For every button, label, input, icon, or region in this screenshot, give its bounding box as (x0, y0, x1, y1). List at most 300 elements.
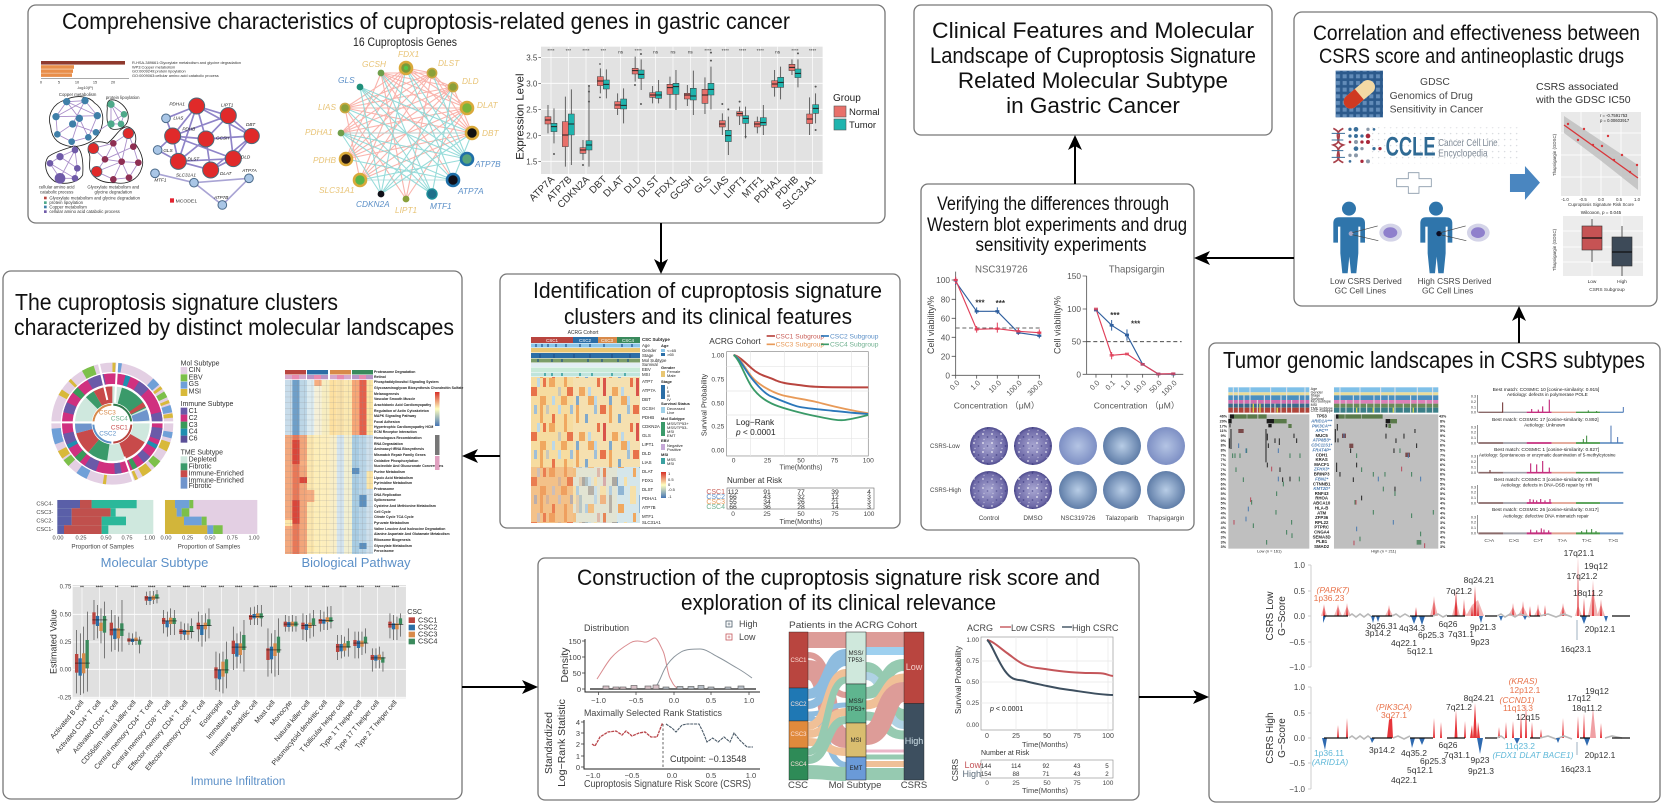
table: ACRG number at risk: 21 (831, 499, 839, 506)
chart: CSRS low GISTIC G-score: 7q21.2 (1446, 586, 1472, 596)
chart: expression box plot: GCSH (668, 174, 696, 203)
chart: score distribution density: −1.0 (591, 696, 606, 705)
table: CSRS number at risk: CSRS (951, 759, 960, 781)
icon: GDSC capsule (1336, 71, 1383, 117)
chart: biological pathway heatmap: Alanine Aspartate And Glutamate Metabolism (374, 532, 450, 536)
image: colony formation wells: NSC319726 (1061, 515, 1096, 522)
table: CSRS number at risk: 0 (985, 780, 989, 787)
table: CSRS number at risk: 25 (1012, 780, 1020, 787)
chart: ACRG cohort heatmap: Female (667, 369, 681, 374)
chart: gene correlation circle network: DLD (462, 76, 479, 86)
chart: ACRG cohort heatmap: DBT (642, 397, 651, 402)
title: identification (533, 278, 882, 329)
logo: CCLE: Cancer Cell Line (1438, 138, 1498, 149)
chart: oncoprint low and high: 46% (1220, 415, 1228, 419)
chart: oncoprint low and high: 5% (1440, 429, 1446, 433)
chart: ACRG survival curves: ACRG Cohort (709, 336, 761, 346)
chart: oncoprint low and high: 4% (1221, 521, 1227, 525)
chart: enrichment bars: 15 (93, 80, 97, 84)
chart: enrichment bars: WP3:Copper metabolism (132, 64, 175, 69)
chart: immune infiltration box plot: Natural killer cell (274, 699, 312, 743)
chart: expression box plot: ATP7B (545, 174, 575, 204)
chart: expression box plot: **** (791, 48, 799, 53)
chart: enrichment bars: GO:0009063:cellular amino acid catabolic process (132, 73, 219, 78)
legend: subtype keys: C3 (189, 422, 198, 429)
chart: immune infiltration box plot: **** (357, 585, 364, 590)
chart: CSRS survival curves: 1.00 (966, 637, 979, 644)
table: ACRG number at risk: 77 (797, 489, 805, 496)
chart: sankey CSC to Mol Subtype to CSRS: CSC3 (790, 732, 807, 738)
chart: maximally selected rank statistics: Cuproptosis Signature Risk Score (CSRS) (584, 779, 751, 790)
chart: CSRS survival curves: 0.50 (966, 679, 979, 686)
chart: CSRS high GISTIC G-score: 4q22.1 (1391, 775, 1417, 785)
chart: oncoprint low and high: Gender (1311, 390, 1324, 394)
title: clinical features: in Gastric Cancer (1006, 93, 1180, 118)
chart: CSRS low GISTIC G-score: G−Score (1277, 596, 1288, 636)
chart: oncoprint low and high: 8% (1440, 458, 1446, 462)
chart: oncoprint low and high: Low (n = 161) (1257, 548, 1282, 553)
title: verifying the differences: Western blot experiments and drug (927, 214, 1187, 236)
chart: immune stacked bars: 1.00 (144, 536, 155, 542)
chart: immune infiltration box plot: ** (289, 585, 293, 590)
chart: immune infiltration box plot: Type 2 T helper cell (354, 699, 399, 750)
chart: oncoprint low and high: 7% (1221, 468, 1227, 472)
chart: immune infiltration box plot: 0.25 (60, 640, 72, 646)
chart: mutational signatures: T>C (1582, 538, 1592, 544)
chart: oncoprint low and high: MUC5 (1316, 433, 1328, 438)
table: ACRG number at risk: 66 (729, 504, 737, 511)
chart: NSC319726 viability: 100 (936, 275, 950, 285)
chart: oncoprint low and high: 4% (1440, 516, 1446, 520)
chart: biological pathway heatmap: Nucleotide And Glucuronate Conversions (374, 464, 443, 468)
chart: mutational signatures: Aetiology: Spontaneous or enzymatic deamination of 5-methylcytosine (1479, 453, 1616, 458)
chart: gene correlation circle network: PDHA1 (305, 127, 333, 137)
chart: molecular stacked bars: 0.50 (204, 536, 215, 542)
chart: biological pathway heatmap: Pyruvate Metabolism (374, 521, 409, 525)
chart: maximally selected rank statistics: Maximally Selected Rank Statistics (584, 708, 722, 719)
chart: sankey CSC to Mol Subtype to CSRS: MSS/ (849, 699, 864, 705)
chart: oncoprint low and high: 6% (1221, 482, 1227, 486)
chart: ACRG cohort heatmap: Gender (661, 365, 675, 370)
table: ACRG number at risk: 28 (797, 504, 805, 511)
chart: gene correlation circle network: MTF1 (430, 201, 452, 211)
chart: sankey CSC to Mol Subtype to CSRS: CSRS (901, 780, 927, 791)
chart: oncoprint low and high: 4% (1440, 535, 1446, 539)
title: correlation and effectiveness (1313, 22, 1640, 68)
chart: immune infiltration box plot: CSC2 (418, 622, 438, 631)
chart: biological pathway heatmap: RNA Degradation (374, 442, 403, 446)
chart: expression box plot: **** (704, 48, 712, 53)
chart: expression box plot: **** (635, 48, 642, 53)
chart: oncoprint low and high: MACF1 (1314, 462, 1330, 467)
chart: expression box plot: LIPT1 (722, 174, 749, 201)
chart: box plot low vs high CSRS: Low (1588, 279, 1597, 285)
chart: CSRS high GISTIC G-score: G−Score (1277, 718, 1288, 758)
chart: MCODE network: DLD (241, 155, 251, 160)
chart: oncoprint low and high: ATM (1317, 510, 1327, 515)
chart: CSRS low GISTIC G-score: 9p21.3 (1470, 622, 1496, 632)
chart: biological pathway heatmap: Phosphatidylinositol Signaling System (374, 380, 439, 384)
chart: oncoprint low and high: KMT2D* (1313, 486, 1330, 491)
chart: ACRG cohort heatmap: DLD (642, 451, 651, 456)
chart: ACRG cohort heatmap: Survival (642, 362, 658, 367)
table: ACRG number at risk: CSC1 (706, 489, 725, 496)
chart: ACRG cohort heatmap: Gender (642, 348, 657, 353)
image: colony formation wells: Control (979, 515, 999, 522)
chart: maximally selected rank statistics: −0.5 (625, 771, 639, 780)
chart: ACRG cohort heatmap: DLST (642, 487, 654, 492)
chart: CSRS low GISTIC G-score: 4q22.1 (1391, 638, 1417, 648)
chart: pathway cluster network: Copper metabolism (49, 204, 87, 209)
chart: ACRG cohort heatmap: 1 (668, 471, 671, 476)
chart: biological pathway heatmap: Hypertrophic Cardiomyopathy HCM (374, 425, 433, 429)
chart: immune infiltration box plot: *** (219, 585, 224, 590)
chart: score distribution density: 0 (577, 685, 581, 694)
chart: ACRG survival curves: Log−Rank (736, 417, 775, 427)
chart: ACRG cohort heatmap: >65 (667, 352, 675, 357)
table: CSRS number at risk: 88 (1013, 771, 1020, 778)
heading: 16 cuproptosis genes: 16 Cuproptosis Genes (353, 35, 457, 49)
chart: mutational signatures: 0.3 (1471, 515, 1476, 519)
chart: ACRG cohort heatmap: Male (667, 373, 676, 378)
chart: mutational signatures (1471, 387, 1623, 544)
chart: oncoprint low and high: Stage (1311, 394, 1320, 398)
chart: oncoprint low and high: 7% (1440, 439, 1446, 443)
chart: immune infiltration box plot: **** (270, 585, 277, 590)
chart: NSC319726 viability: 300.0 (1025, 378, 1045, 398)
arrow: correlation to verifying (1194, 251, 1294, 265)
chart: NSC319726 viability: NSC319726 (975, 265, 1028, 276)
heading: immune infiltration: Immune Infiltration (191, 776, 285, 788)
chart: ACRG cohort heatmap: LIAS (642, 460, 652, 465)
chart: pathway cluster network: Glyoxylate metabolism and (87, 185, 140, 190)
chart: ACRG cohort heatmap: Stage (661, 379, 673, 384)
chart: CSRS high GISTIC G-score: 11q23.2 (1505, 741, 1535, 751)
chart: oncoprint low and high: 5% (1221, 492, 1227, 496)
chart: CSRS low GISTIC G-score: 9p23 (1471, 637, 1490, 647)
chart: biological pathway heatmap: Retinol (374, 375, 386, 379)
chart: pathway cluster network: cellular amino acid catabolic process (49, 209, 120, 214)
diagram: drug databases and patient cell lines: GC Cell Lines (1422, 285, 1473, 295)
chart: expression box plot: **** (547, 48, 555, 53)
table: ACRG number at risk: 3 (867, 494, 871, 501)
chart: ACRG survival curves: 1.00 (711, 352, 725, 359)
table: ACRG number at risk: 14 (831, 504, 839, 511)
chart: thapsigargin viability: *** (1110, 311, 1121, 320)
chart: oncoprint low and high: 4% (1440, 511, 1446, 515)
chart: ACRG cohort heatmap: EMT (667, 433, 676, 438)
chart: mutational signatures: T>A (1558, 538, 1568, 544)
chart: CSRS high GISTIC G-score (1265, 676, 1630, 794)
chart: immune infiltration box plot: Effector memory CD8⁺ T cell (145, 699, 207, 772)
chart: CSRS high GISTIC G-score: 9p21.3 (1468, 766, 1494, 776)
legend: subtype keys: Immune Subtype (181, 401, 234, 408)
chart: oncoprint low and high: TME Subtype (1311, 406, 1333, 410)
chart: score distribution density: Distribution (584, 623, 629, 633)
chart: oncoprint low and high: 6% (1440, 463, 1446, 467)
chart: immune stacked bars: CSC3- (36, 510, 53, 516)
chart: CSRS low GISTIC G-score: 20p12.1 (1585, 624, 1616, 634)
chart: immune infiltration box plot: Type 1 T helper cell (319, 699, 364, 750)
chart: expression box plot: ns (618, 49, 624, 54)
chart: oncoprint low and high: 20% (1220, 419, 1228, 423)
title: signature clusters: The cuproptosis signature clusters (15, 289, 338, 315)
table: CSRS number at risk: 114 (1011, 763, 1021, 770)
chart: mutational signatures: 0.0 (1471, 441, 1476, 445)
chart: ACRG cohort heatmap: IV (667, 397, 671, 402)
chart: CSRS low GISTIC G-score: 16q23.1 (1561, 644, 1592, 654)
chart: ACRG cohort heatmap: 0.5 (668, 477, 674, 482)
chart: CSRS survival curves: p < 0.0001 (989, 706, 1023, 713)
chart: expression box plot: 2.5 (526, 105, 538, 114)
chart: CSRS survival curves (954, 623, 1119, 749)
chart: ACRG survival curves: 0 (732, 458, 736, 465)
chart: CSRS high GISTIC G-score: 12q15 (1516, 712, 1540, 722)
chart: oncoprint low and high: CDH1 (1316, 452, 1328, 457)
title: construction (577, 565, 1100, 615)
chart: biological pathway heatmap (285, 370, 463, 554)
chart: oncoprint low and high: 11% (1220, 429, 1228, 433)
chart: mutational signatures: 0.3 (1471, 425, 1476, 429)
chart: CSRS high GISTIC G-score: 6q26 (1439, 740, 1458, 750)
table: ACRG number at risk: 39 (831, 489, 839, 496)
chart: oncoprint low and high: 9% (1221, 439, 1227, 443)
text: CSRS associated: CSRS associated (1536, 81, 1618, 93)
chart: MCODE network: GCSH (216, 135, 230, 140)
chart: immune infiltration box plot: Estimated Value (49, 609, 59, 674)
table: CSRS number at risk: 75 (1073, 780, 1081, 787)
legend: subtype keys: C1 (189, 408, 198, 415)
chart: CSRS survival curves: 0.25 (966, 700, 979, 707)
legend: group: Group (833, 93, 861, 104)
chart: enrichment bars: GO:0009249:protein lipoylation (132, 69, 186, 74)
chart: mutational signatures: Best match: COSMIC 3 [cosine-similarity: 0.688] (1494, 477, 1599, 482)
chart: immune infiltration box plot: Mast cell (254, 699, 277, 725)
chart: mutational signatures: 0.3 (1471, 485, 1476, 489)
chart: CSRS high GISTIC G-score: 0.5 (1294, 709, 1306, 718)
arrow: tumor landscapes to correlation (1512, 306, 1526, 343)
chart: oncoprint low and high: 6% (1221, 477, 1227, 481)
chart: oncoprint low and high: 3% (1440, 545, 1446, 549)
chart: immune infiltration box plot: Monocyte (269, 699, 294, 727)
chart: sankey CSC to Mol Subtype to CSRS: High (905, 736, 923, 746)
chart: molecular stacked bars: Proportion of Samples (178, 544, 240, 551)
chart: biological pathway heatmap: Glyoxylate Metabolism (374, 544, 412, 548)
chart: expression box plot: 2.0 (526, 131, 538, 140)
chart: ACRG cohort heatmap: CSC1 (546, 338, 558, 343)
diagram: drug databases and patient cell lines: High CSRS Derived (1418, 276, 1492, 286)
chart: biological pathway heatmap: Arachidonic Acid Cardiomyopathy (374, 403, 431, 407)
chart: oncoprint low and high: HLA-B (1315, 505, 1328, 510)
chart: CSRS survival curves: 0.00 (966, 722, 979, 729)
table: CSRS number at risk: 71 (1043, 771, 1050, 778)
chart: sankey CSC to Mol Subtype to CSRS: CSC4 (790, 762, 807, 768)
chart: oncoprint low and high: PLB1 (1316, 539, 1328, 544)
table: ACRG number at risk: 4 (867, 489, 871, 496)
chart: sunburst of subtypes: CSC1 (111, 425, 128, 432)
chart: score distribution density: 0.5 (706, 696, 716, 705)
chart: expression box plot: **** (582, 48, 590, 53)
chart: thapsigargin viability: 0.1 (1103, 378, 1117, 392)
chart: CSRS high GISTIC G-score: 3q27.1 (1381, 710, 1407, 720)
chart: CSRS high GISTIC G-score: 3p14.2 (1369, 745, 1395, 755)
chart: ACRG survival curves: CSC2 Subgroup (830, 333, 879, 340)
chart: CSRS high GISTIC G-score: (ARID1A) (1312, 757, 1348, 767)
legend: subtype keys: MSI (189, 389, 201, 396)
chart: CSRS low GISTIC G-score: 1p36.23 (1314, 593, 1345, 603)
chart: ACRG cohort heatmap: ATP7A (642, 388, 656, 393)
chart: ACRG survival curves: 0.00 (711, 447, 725, 454)
chart: NSC319726 viability: 1.0 (969, 378, 982, 392)
table: CSRS number at risk: 100 (1103, 780, 1114, 787)
chart: oncoprint low and high: 6% (1221, 487, 1227, 491)
table: ACRG number at risk: CSC3 (706, 499, 725, 506)
chart: ACRG cohort heatmap: Deceased (667, 406, 685, 411)
chart: sankey CSC to Mol Subtype to CSRS: CSC1 (790, 658, 807, 664)
chart: CSRS survival curves: 100 (1102, 733, 1114, 740)
chart: NSC319726 viability: 20 (941, 351, 950, 361)
chart: CSRS low GISTIC G-score: 17q21.1 (1564, 548, 1595, 558)
chart: oncoprint low and high: APC** (1314, 428, 1328, 433)
chart: oncoprint low and high: 7% (1440, 453, 1446, 457)
chart: maximally selected rank statistics: 1.0 (746, 771, 756, 780)
title: verifying the differences (927, 193, 1187, 256)
chart: gene correlation circle network: SLC31A1 (319, 185, 355, 195)
legend: subtype keys: CIN (189, 367, 201, 374)
chart: oncoprint low and high: ZFHX3* (1313, 467, 1330, 472)
chart: immune stacked bars: CSC1- (36, 527, 53, 533)
chart: oncoprint low and high: MSI (1311, 403, 1317, 407)
chart: CSRS high GISTIC G-score: 19q12 (1585, 686, 1609, 696)
chart: expression box plot: PDHA1 (752, 174, 784, 206)
chart: immune infiltration box plot: *** (375, 585, 381, 590)
chart: oncoprint low and high: 8% (1221, 448, 1227, 452)
chart: expression box plot: GLS (692, 174, 714, 196)
chart: oncoprint low and high: 5% (1440, 468, 1446, 472)
legend: subtype keys: Depleted (189, 457, 217, 464)
chart: ACRG survival curves: 0.25 (711, 424, 725, 431)
chart: mutational signatures: C>T (1534, 538, 1543, 544)
legend: subtype keys: EBV (189, 374, 203, 381)
chart: CSRS high GISTIC G-score: 9p23 (1471, 755, 1490, 765)
chart: ACRG cohort heatmap: MSS (667, 457, 676, 462)
diagram: drug databases and patient cell lines: Sensitivity in Cancer (1390, 104, 1484, 115)
chart: MCODE network: GLS (163, 148, 174, 153)
chart: expression box plot: DBT (588, 174, 609, 196)
chart: ACRG cohort heatmap: -1 (668, 494, 672, 499)
chart: immune infiltration box plot: 0.75 (60, 585, 72, 591)
chart: biological pathway heatmap: Peroxisome (374, 549, 394, 553)
table: ACRG number at risk: 12 (831, 494, 839, 501)
chart: mutational signatures: C>G (1509, 538, 1519, 544)
logo: CCLE: CCLE (1386, 131, 1436, 161)
chart: CSRS high GISTIC G-score: 11q13.3 (1503, 703, 1533, 713)
chart: immune infiltration box plot: 0.50 (60, 612, 72, 618)
chart: scatter CSRS vs thapsigargin: p = 0.00603917 (1600, 118, 1630, 123)
chart: oncoprint low and high: 4% (1440, 487, 1446, 491)
chart: oncoprint low and high: 4% (1221, 511, 1227, 515)
chart: maximally selected rank statistics: 0.5 (706, 771, 716, 780)
chart: CSRS low GISTIC G-score: 17q21.2 (1567, 571, 1598, 581)
chart: ACRG cohort heatmap: MSI (667, 461, 674, 466)
chart: expression box plot: **** (757, 48, 764, 53)
chart: biological pathway heatmap: Aminoacyl tRNA Biosynthesis (374, 447, 424, 451)
chart: CSRS low GISTIC G-score: 6q26 (1439, 619, 1458, 629)
chart: score distribution density: High (739, 619, 758, 629)
chart: oncoprint low and high: Age (1311, 387, 1317, 391)
chart: pathway cluster network: glycine degradation (95, 189, 133, 194)
chart: CSRS survival curves: 0 (985, 733, 989, 740)
chart: expression box plot: ns (653, 49, 659, 54)
chart: oncoprint low and high: 3% (1221, 540, 1227, 544)
chart: oncoprint low and high: 3% (1440, 531, 1446, 535)
chart: score distribution density: 100 (568, 653, 581, 662)
panel: cuproptosis signature clusters molecular landscapes (3, 271, 463, 799)
chart: maximally selected rank statistics: Log−Rank Statistic (556, 699, 568, 787)
chart: mutational signatures: 0.1 (1471, 526, 1476, 530)
chart: ACRG cohort heatmap: -0.5 (668, 487, 676, 492)
chart: MCODE network: DLAT (220, 171, 233, 176)
chart: sunburst of subtypes: CSC2 (99, 431, 117, 438)
chart: CSRS high GISTIC G-score: (KRAS) (1509, 676, 1538, 686)
chart: ACRG cohort heatmap: Stage (642, 353, 654, 358)
chart: biological pathway heatmap: Cell Cycle (374, 510, 391, 514)
chart: ACRG cohort heatmap: CSC2 (579, 338, 591, 343)
chart: enrichment bars: 0 (40, 80, 43, 84)
chart: MCODE network: ATP7B (213, 195, 228, 200)
diagram: drug databases and patient cell lines: GC Cell Lines (1335, 285, 1386, 295)
table: CSRS number at risk: 2 (1105, 771, 1109, 778)
chart: immune infiltration box plot: Activated B cell (49, 699, 86, 741)
table: CSRS number at risk: Low (964, 760, 981, 770)
chart: gene correlation circle network: ATP7B (474, 159, 501, 169)
title: identification: Identification of cuproptosis signature (533, 278, 882, 303)
chart: maximally selected rank statistics: 0 (576, 763, 580, 772)
chart: ACRG cohort heatmap: I (667, 385, 668, 390)
chart: immune infiltration box plot: Central memory CD8⁺ T cell (111, 699, 173, 771)
chart: biological pathway heatmap: MAPK Signaling Pathway (374, 414, 416, 418)
chart: CSRS low GISTIC G-score: −0.5 (1289, 638, 1306, 647)
title: comprehensive characteristics: Comprehensive characteristics of cuproptosis-related genes in gastric cancer (62, 8, 790, 34)
chart: ACRG cohort heatmap: GCSH (642, 406, 655, 411)
chart: NSC319726 viability (926, 265, 1045, 410)
chart: molecular stacked bars: 0.00 (160, 536, 171, 542)
title: identification: clusters and its clinical features (564, 304, 852, 329)
chart: sankey CSC to Mol Subtype to CSRS: EMT (850, 766, 863, 772)
chart: CSRS low GISTIC G-score: 6p25.3 (1418, 630, 1444, 640)
chart: immune infiltration box plot: -0.25 (58, 695, 72, 701)
arrow: verifying to clinical features (1068, 135, 1082, 184)
chart: mutational signatures: Aetiology: defective DNA mismatch repair (1503, 513, 1589, 518)
chart: immune infiltration box plot: Immature B cell (206, 699, 242, 741)
chart: immune infiltration box plot: **** (235, 585, 242, 590)
chart: maximally selected rank statistics: Cutpoint: −0.13548 (670, 754, 746, 764)
table: CSRS number at risk: Time(Months) (1022, 786, 1068, 795)
chart: oncoprint low and high: BRINP3 (1314, 472, 1330, 477)
diagram: drug databases and patient cell lines: GDSC (1420, 77, 1450, 88)
chart: CSRS low GISTIC G-score: 3p14.2 (1365, 628, 1391, 638)
chart: CSRS low GISTIC G-score: CSRS Low (1265, 591, 1276, 640)
chart: MCODE network: LIPT1 (221, 102, 234, 107)
chart: ACRG survival curves: 0.50 (711, 400, 725, 407)
chart: scatter CSRS vs thapsigargin (1552, 112, 1641, 207)
chart: expression box plot: **** (722, 48, 729, 53)
chart: immune stacked bars (36, 500, 155, 551)
chart: ACRG cohort heatmap: GLS (642, 433, 651, 438)
chart: gene correlation circle network: LIPT1 (395, 205, 417, 215)
panel: tumor genomic landscapes in CSRS subtypes (1209, 343, 1660, 802)
table: CSRS number at risk: 154 (981, 771, 992, 778)
